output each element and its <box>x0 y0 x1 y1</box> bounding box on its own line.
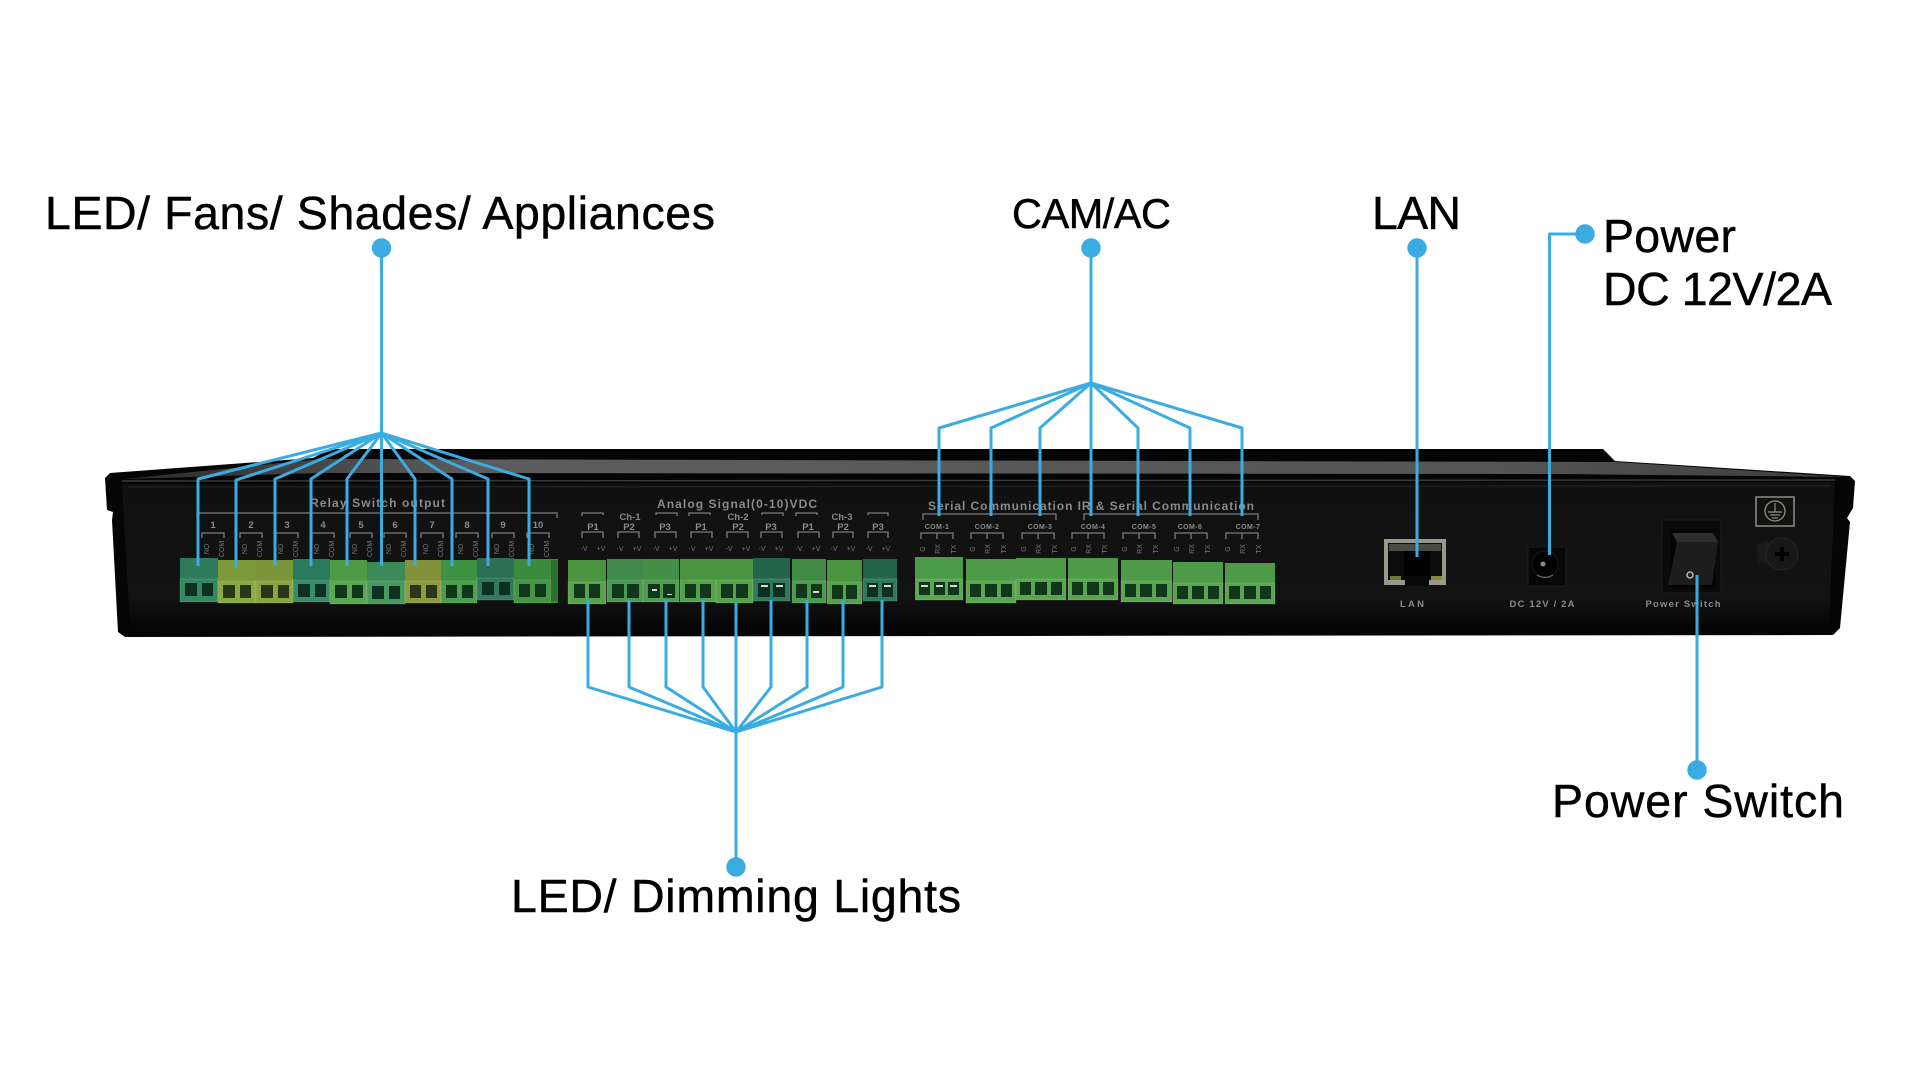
relay silkscreen labels: 3 <box>284 520 290 531</box>
serial silkscreen labels: COM-5 <box>1132 524 1156 531</box>
serial silkscreen labels: RX <box>1137 544 1144 554</box>
serial silkscreen labels <box>920 499 1263 554</box>
analog terminal block <box>568 558 897 604</box>
analog silkscreen labels: P1 <box>587 522 600 533</box>
label: CAM/AC: CAM/AC <box>1012 190 1171 237</box>
serial silkscreen labels: Serial Communication IR & Serial Communication <box>928 499 1254 513</box>
relay silkscreen labels: NO <box>278 543 285 554</box>
analog silkscreen labels: +V <box>775 546 784 553</box>
relay silkscreen labels: NO <box>458 543 465 554</box>
DC power jack <box>1510 547 1575 610</box>
relay silkscreen labels: 6 <box>392 520 398 531</box>
ground screw <box>1757 538 1798 570</box>
relay silkscreen labels: COM <box>329 541 336 557</box>
analog silkscreen labels: P2 <box>732 522 744 533</box>
relay silkscreen labels: COM <box>438 541 445 557</box>
analog silkscreen labels: P2 <box>837 522 849 533</box>
serial terminal block <box>915 557 1275 604</box>
analog silkscreen labels: -V <box>796 546 803 553</box>
label: power <box>1603 210 1832 315</box>
analog silkscreen labels: -V <box>830 546 838 553</box>
relay silkscreen labels: 1 <box>210 520 216 531</box>
serial silkscreen labels: G <box>1174 546 1181 552</box>
relay silkscreen labels: 4 <box>320 520 326 531</box>
analog silkscreen labels: -V <box>758 546 766 553</box>
analog silkscreen labels: P3 <box>659 522 671 533</box>
relay silkscreen labels: Relay Switch output <box>310 496 445 510</box>
relay silkscreen labels: 7 <box>429 520 435 531</box>
analog silkscreen labels: +V <box>812 546 821 553</box>
label: relay loads: LED/ Fans/ Shades/ Appliances <box>45 187 715 239</box>
serial silkscreen labels: G <box>1021 546 1028 552</box>
LAN port <box>1384 539 1446 610</box>
callout line: power switch <box>1687 575 1707 780</box>
DC power jack: DC 12V / 2A <box>1510 599 1575 610</box>
relay silkscreen labels: 10 <box>533 520 543 531</box>
analog silkscreen labels: P1 <box>695 522 708 533</box>
analog silkscreen labels: -V <box>616 546 624 553</box>
serial silkscreen labels: RX <box>1086 544 1093 554</box>
serial silkscreen labels: G <box>920 546 927 552</box>
analog silkscreen labels: +V <box>705 546 714 553</box>
analog silkscreen labels: P2 <box>623 522 635 533</box>
serial silkscreen labels: TX <box>951 544 958 553</box>
analog silkscreen labels: -V <box>688 546 696 553</box>
serial silkscreen labels: G <box>1225 546 1232 552</box>
analog silkscreen labels: P3 <box>765 522 777 533</box>
serial silkscreen labels: TX <box>1102 544 1109 553</box>
serial silkscreen labels: TX <box>1153 544 1160 553</box>
device chassis <box>105 449 1855 637</box>
serial silkscreen labels: TX <box>1256 544 1263 553</box>
analog silkscreen labels: Analog Signal(0-10)VDC <box>657 497 817 511</box>
serial silkscreen labels: G <box>1071 546 1078 552</box>
relay silkscreen labels: NO <box>204 543 211 554</box>
relay silkscreen labels: NO <box>242 543 249 554</box>
analog silkscreen labels: +V <box>882 546 891 553</box>
analog silkscreen labels: -V <box>726 546 733 553</box>
analog silkscreen labels: -V <box>652 546 660 553</box>
analog silkscreen labels: P1 <box>802 522 815 533</box>
serial silkscreen labels: RX <box>1189 544 1196 554</box>
serial silkscreen labels: COM-3 <box>1028 524 1052 531</box>
relay silkscreen labels: COM <box>219 541 226 557</box>
callout lines: relay <box>198 238 529 568</box>
serial silkscreen labels: COM-2 <box>975 524 999 531</box>
relay silkscreen labels: NO <box>352 543 359 554</box>
relay silkscreen labels: COM <box>544 541 551 557</box>
callout lines: dimming <box>588 600 882 877</box>
relay silkscreen labels: COM <box>257 541 264 557</box>
serial silkscreen labels: TX <box>1001 544 1008 553</box>
relay silkscreen labels: NO <box>529 543 536 554</box>
serial silkscreen labels: TX <box>1052 544 1059 553</box>
serial silkscreen labels: COM-6 <box>1178 524 1202 531</box>
label: power: DC 12V/2A <box>1603 263 1832 315</box>
relay silkscreen labels: COM <box>509 541 516 557</box>
analog silkscreen labels: P3 <box>872 522 884 533</box>
analog silkscreen labels: Ch-3 <box>831 512 853 523</box>
relay silkscreen labels: NO <box>314 543 321 554</box>
power rocker switch <box>1646 520 1721 610</box>
power rocker switch: Power Switch <box>1646 599 1721 610</box>
serial silkscreen labels: G <box>1122 546 1129 552</box>
relay silkscreen labels: 2 <box>248 520 254 531</box>
relay silkscreen labels: 9 <box>500 520 506 531</box>
icon: ground symbol <box>1756 497 1794 526</box>
relay silkscreen labels: NO <box>386 543 393 554</box>
relay silkscreen labels: 8 <box>464 520 470 531</box>
analog silkscreen labels: +V <box>669 546 678 553</box>
analog silkscreen labels: Ch-2 <box>727 512 749 523</box>
serial silkscreen labels: COM-1 <box>925 524 949 531</box>
serial silkscreen labels: RX <box>985 544 992 554</box>
serial silkscreen labels: RX <box>1240 544 1247 554</box>
relay silkscreen labels: COM <box>401 541 408 557</box>
relay silkscreen labels: COM <box>473 541 480 557</box>
serial silkscreen labels: RX <box>935 544 942 554</box>
analog silkscreen labels: +V <box>847 546 856 553</box>
analog silkscreen labels <box>580 497 891 553</box>
relay silkscreen labels: 5 <box>358 520 364 531</box>
relay silkscreen labels: NO <box>494 543 501 554</box>
serial silkscreen labels: TX <box>1205 544 1212 553</box>
callout line: LAN <box>1407 238 1427 557</box>
serial silkscreen labels: G <box>970 546 977 552</box>
analog silkscreen labels: -V <box>866 546 873 553</box>
serial silkscreen labels: COM-7 <box>1236 524 1260 531</box>
label: power switch: Power Switch <box>1552 775 1844 827</box>
callout lines: serial <box>939 238 1242 516</box>
label: dimming lights: LED/ Dimming Lights <box>511 870 961 922</box>
serial silkscreen labels: COM-4 <box>1081 524 1105 531</box>
analog silkscreen labels: Ch-1 <box>619 512 641 523</box>
analog silkscreen labels: +V <box>597 546 606 553</box>
relay silkscreen labels: COM <box>367 541 374 557</box>
relay silkscreen labels: NO <box>423 543 430 554</box>
LAN port: LAN <box>1400 599 1424 610</box>
label: LAN: LAN <box>1372 187 1461 239</box>
label: power: Power <box>1603 210 1736 262</box>
analog silkscreen labels: +V <box>633 546 642 553</box>
relay silkscreen labels: COM <box>293 541 300 557</box>
callout line: power <box>1550 224 1595 555</box>
analog silkscreen labels: -V <box>580 546 588 553</box>
serial silkscreen labels: RX <box>1036 544 1043 554</box>
analog silkscreen labels: +V <box>742 546 751 553</box>
relay silkscreen labels <box>197 496 557 557</box>
relay terminal block <box>180 558 558 604</box>
